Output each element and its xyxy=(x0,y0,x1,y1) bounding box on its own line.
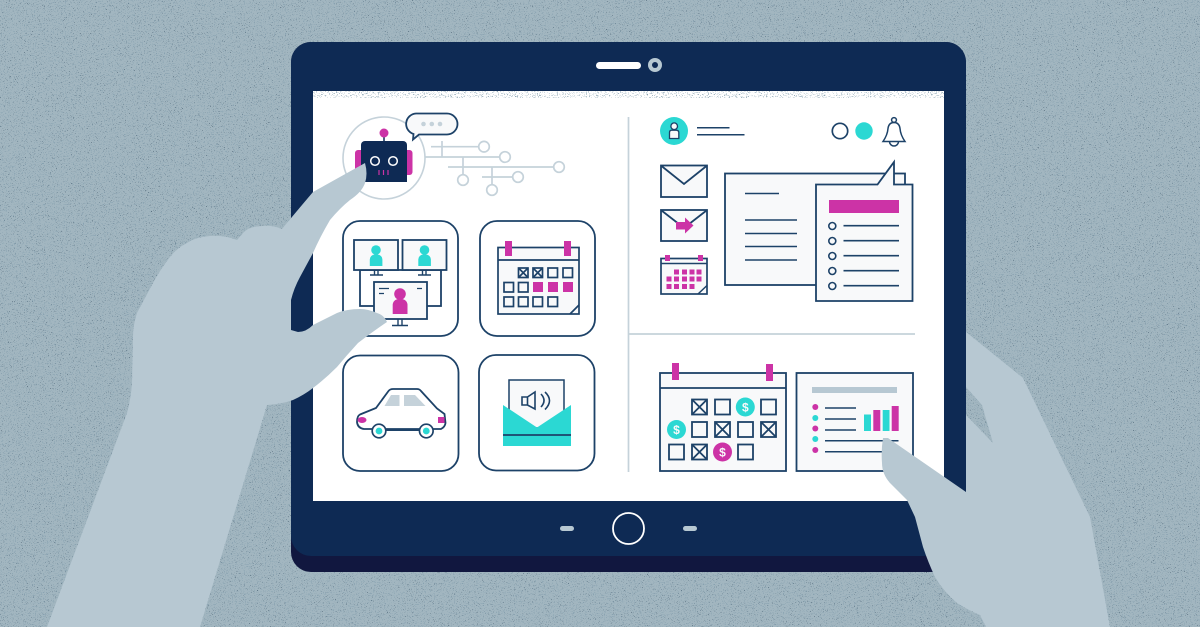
right hand xyxy=(882,332,1110,627)
tablet screen xyxy=(313,91,944,501)
panel: billing calendar xyxy=(660,363,786,471)
tablet body xyxy=(291,42,966,572)
monitor left xyxy=(354,240,398,275)
calendar cells xyxy=(669,400,776,460)
right pill button xyxy=(683,526,697,531)
camera xyxy=(648,58,662,72)
panel: message document xyxy=(725,174,905,285)
speech bubble xyxy=(406,114,458,140)
dollar badge teal left: $ xyxy=(673,423,680,437)
monitor front xyxy=(374,282,427,326)
speaker slot xyxy=(596,62,641,69)
panel: email announcement card xyxy=(479,355,594,470)
robot antenna xyxy=(380,128,388,142)
robot mouth xyxy=(379,170,388,175)
name lines xyxy=(697,128,744,135)
car body xyxy=(357,389,446,429)
robot circle xyxy=(343,117,425,199)
back screen xyxy=(360,270,441,306)
icon: envelope with arrow xyxy=(661,210,707,241)
panel: car card xyxy=(343,356,458,471)
calendar xyxy=(498,241,579,314)
envelope xyxy=(503,405,571,446)
circuit lines xyxy=(425,141,564,195)
bell icon xyxy=(883,118,905,146)
divider vertical xyxy=(628,117,630,472)
panel: report chart xyxy=(796,373,913,471)
robot ears xyxy=(355,150,412,175)
megaphone icon xyxy=(522,392,550,410)
left hand xyxy=(47,163,387,627)
panel: checklist callout xyxy=(816,162,912,301)
status circle teal xyxy=(855,122,873,140)
robot eyes xyxy=(371,157,397,165)
report lines xyxy=(825,408,898,452)
panel: video meeting card xyxy=(343,221,458,336)
checklist heading bar xyxy=(829,200,899,213)
icon: envelope xyxy=(661,166,707,197)
left pill button xyxy=(560,526,574,531)
car windows xyxy=(384,395,426,406)
bar chart xyxy=(864,406,899,431)
home button xyxy=(613,513,644,544)
report title bar xyxy=(812,387,897,393)
letter xyxy=(509,380,564,428)
divider horizontal xyxy=(629,333,915,335)
panel: robot assistant xyxy=(343,114,564,199)
icon: small calendar xyxy=(661,255,707,294)
status circle outline xyxy=(832,123,848,139)
panel: calendar card xyxy=(480,221,595,336)
report bullets xyxy=(812,404,818,453)
car wheels xyxy=(372,424,433,438)
robot head xyxy=(361,141,407,182)
dollar badge teal top: $ xyxy=(742,400,749,414)
avatar xyxy=(660,117,688,145)
dollar badge magenta: $ xyxy=(719,445,726,459)
panel: notification header xyxy=(660,117,905,146)
checklist items xyxy=(829,222,899,290)
monitor right xyxy=(402,240,446,275)
car lights xyxy=(358,417,444,423)
